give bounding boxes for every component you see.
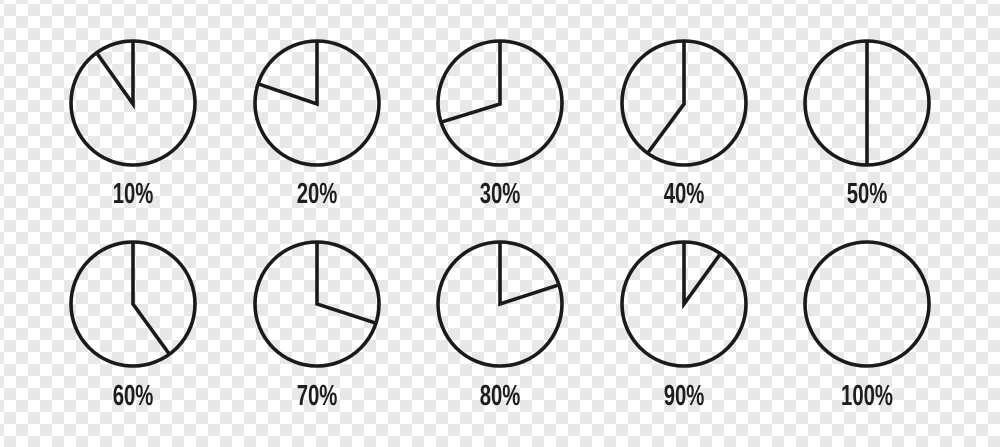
label: 100%: 100% — [841, 380, 893, 412]
label: 80%: 80% — [480, 380, 520, 412]
pie: 100% — [805, 242, 929, 366]
label: 30%: 30% — [480, 178, 520, 210]
label: 50%: 50% — [847, 178, 887, 210]
pie: 20% — [255, 41, 379, 165]
pie: 80% — [438, 242, 562, 366]
pie: 50% — [805, 41, 929, 165]
label: 70%: 70% — [297, 380, 337, 412]
pie: 30% — [438, 41, 562, 165]
label: 90%: 90% — [664, 380, 704, 412]
label: 20%: 20% — [297, 178, 337, 210]
pie: 10% — [71, 41, 195, 165]
pie: 70% — [255, 242, 379, 366]
pie: 60% — [71, 242, 195, 366]
label: 60%: 60% — [113, 380, 153, 412]
pie: 90% — [622, 242, 746, 366]
label: 40%: 40% — [664, 178, 704, 210]
label: 10%: 10% — [113, 178, 153, 210]
pie: 40% — [622, 41, 746, 165]
